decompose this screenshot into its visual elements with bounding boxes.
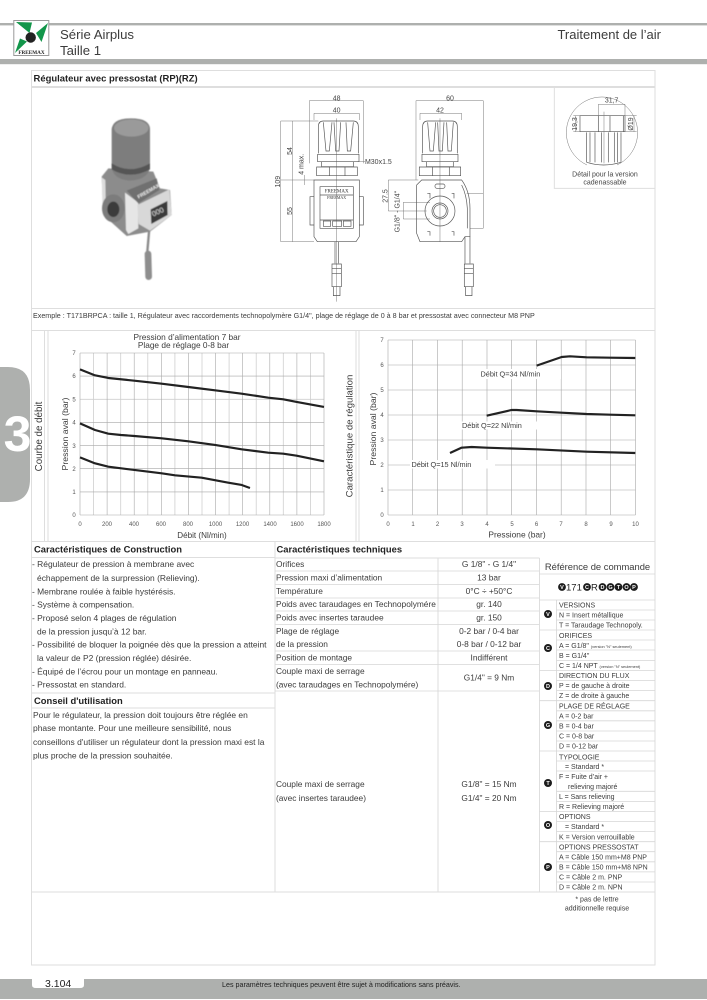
row lines xyxy=(540,574,655,882)
spec values: Indifférent xyxy=(471,652,508,662)
spec values: gr. 140 xyxy=(476,599,502,609)
page number tab: 3.104 xyxy=(45,978,71,990)
x axis ticks xyxy=(386,522,639,528)
dimensions: 48 xyxy=(333,96,341,103)
y axis ticks: 2 xyxy=(72,467,76,473)
group: ports: C = 1/4 NPT (version "N" seulement) xyxy=(559,663,641,670)
logo: Freemax: FREEMAX xyxy=(18,50,45,56)
x axis ticks: 8 xyxy=(584,522,588,528)
detail drawing xyxy=(566,97,638,165)
dimensions: 60 xyxy=(446,96,454,103)
y axis title: Pression aval (bar) xyxy=(60,397,70,470)
group: typology: L = Sans relieving xyxy=(559,794,615,801)
table grid lines xyxy=(32,542,556,892)
x axis ticks: 800 xyxy=(183,522,194,528)
x axis title: Pressione (bar) xyxy=(488,530,546,540)
y axis ticks: 1 xyxy=(72,490,76,496)
order code: O xyxy=(624,585,629,591)
feature list: - Possibilité de bloquer la poignée dès que la pression a atteint xyxy=(32,640,267,650)
group: versions: N = Insert métallique xyxy=(559,613,623,620)
technical drawing: front view xyxy=(275,96,392,302)
chart: flow curve xyxy=(34,332,331,540)
group: adjustment range xyxy=(544,702,630,750)
y axis ticks: 1 xyxy=(380,488,384,494)
x axis ticks: 0 xyxy=(386,522,390,528)
feature list: - Pressostat en standard. xyxy=(32,680,126,690)
heading: Caractéristiques de Construction xyxy=(34,544,182,554)
group: flow direction xyxy=(544,673,630,700)
spec labels: (avec insertes taraudee) xyxy=(276,793,366,803)
disclaimer: Les paramètres techniques peuvent être sujet à modifications sans préavis. xyxy=(222,981,461,989)
group: adjustment range: PLAGE DE RÉGLAGE xyxy=(559,702,630,710)
spec values: G 1/8" - G 1/4" xyxy=(462,559,516,569)
y axis ticks: 6 xyxy=(380,363,384,369)
dimensions: M30x1.5 xyxy=(365,159,392,166)
x axis ticks: 4 xyxy=(485,522,489,528)
outline: FREEMAX xyxy=(327,195,346,200)
group: pressure switch options: C = Câble 2 m. PNP xyxy=(559,874,623,882)
spec labels xyxy=(276,559,436,803)
dimensions: 109 xyxy=(275,176,282,187)
curves xyxy=(450,356,635,453)
group: pressure switch options: P xyxy=(546,865,550,871)
group: ports: ORIFICES xyxy=(559,633,592,640)
spec labels: Pression maxi d’alimentation xyxy=(276,572,383,582)
group: flow direction: Z = de droite à gauche xyxy=(559,693,629,700)
x axis ticks: 1800 xyxy=(317,522,331,528)
spec values: gr. 150 xyxy=(476,612,502,622)
paragraph xyxy=(33,710,265,760)
group: typology: TYPOLOGIE xyxy=(559,754,600,762)
section: technical specifications xyxy=(276,544,521,803)
group: pressure switch options: A = Câble 150 mm+M8 PNP xyxy=(559,854,647,862)
chart title: Plage de réglage 0-8 bar xyxy=(138,340,229,350)
spec labels: (avec taraudages en Technopolymére) xyxy=(276,680,418,690)
outline xyxy=(417,121,473,296)
order code: T xyxy=(617,585,621,591)
x axis ticks: 0 xyxy=(78,522,82,528)
x axis ticks: 5 xyxy=(510,522,514,528)
heading: Conseil d'utilisation xyxy=(34,695,123,706)
dimensions: 27.5 xyxy=(383,189,390,203)
x axis ticks: 1 xyxy=(411,522,415,528)
heading: Référence de commande xyxy=(545,561,650,572)
panel title: Régulateur avec pressostat (RP)(RZ) xyxy=(34,74,198,84)
y axis ticks: 4 xyxy=(72,420,76,426)
dimensions: 54 xyxy=(287,147,294,155)
dimensions: 40 xyxy=(333,108,341,115)
detail drawing: Ø19 xyxy=(628,117,635,131)
group: pressure switch options: OPTIONS PRESSOSTAT xyxy=(559,844,639,852)
group: typology: R = Relieving majoré xyxy=(559,804,624,811)
group: ports xyxy=(544,633,641,670)
x axis ticks xyxy=(78,522,331,528)
paragraph: phase montante. Pour une meilleure sensibilité, nous xyxy=(33,723,231,733)
spec labels: Couple maxi de serrage xyxy=(276,666,365,676)
group: flow direction: D xyxy=(546,684,550,690)
chart side label: Caractéristique de régulation xyxy=(344,375,356,497)
paragraph: plus proche de la pression souhaitée. xyxy=(33,750,173,760)
feature list: échappement de la surpression (Relieving). xyxy=(37,573,200,583)
group: options: = Standard * xyxy=(565,824,604,831)
spec values: G1/8" = 15 Nm xyxy=(461,779,517,789)
y axis ticks: 6 xyxy=(72,374,76,380)
y axis ticks: 3 xyxy=(72,444,76,450)
x axis ticks: 200 xyxy=(102,522,113,528)
spec labels: Couple maxi de serrage xyxy=(276,779,365,789)
feature list: - Équipé de l’écrou pour un montage en panneau. xyxy=(32,666,218,676)
curves xyxy=(80,369,324,488)
order code xyxy=(558,582,638,594)
group: pressure switch options: B = Câble 150 mm+M8 NPN xyxy=(559,864,648,872)
group: adjustment range: A = 0-2 bar xyxy=(559,714,594,720)
product photo xyxy=(102,118,172,277)
group: ports: C xyxy=(546,646,550,652)
footnote: additionnelle requise xyxy=(565,906,629,912)
chart title xyxy=(134,332,241,350)
y axis ticks: 7 xyxy=(380,338,384,344)
spec labels: Poids avec taraudages en Technopolymére xyxy=(276,599,436,609)
footnote: * pas de lettre xyxy=(575,896,619,904)
title: section: Traitement de l’air xyxy=(557,27,662,42)
label: Q=34 xyxy=(478,369,561,379)
cable and connector xyxy=(147,228,149,277)
regulator body: FREEMAX xyxy=(137,183,161,200)
spec values: G1/4" = 9 Nm xyxy=(464,672,514,682)
detail drawing: 19,3 xyxy=(572,117,579,131)
group: pressure switch options: D = Câble 2 m. NPN xyxy=(559,884,623,892)
x axis ticks: 6 xyxy=(535,522,539,528)
group: adjustment range: B = 0-4 bar xyxy=(559,724,594,730)
feature list: - Système à compensation. xyxy=(32,600,134,610)
y axis ticks: 0 xyxy=(380,513,384,519)
feature list: - Membrane roulée à faible hystérésis. xyxy=(32,586,176,596)
y axis ticks: 5 xyxy=(72,398,76,404)
spec labels: Température xyxy=(276,586,323,596)
group: versions: VERSIONS xyxy=(559,603,596,610)
spec values: 0-8 bar / 0-12 bar xyxy=(457,639,521,649)
group: ports: A = G1/8" (version "N" seulement) xyxy=(559,643,632,650)
regulator body xyxy=(102,168,172,236)
footnote xyxy=(565,896,629,912)
feature list: - Proposé selon 4 plages de régulation xyxy=(32,613,177,623)
paragraph: conseillons d'utiliser un régulateur dont la pression maxi est la xyxy=(33,737,265,747)
dimensions: 42 xyxy=(436,108,444,115)
outline: FREEMAX xyxy=(325,190,349,195)
chart title: Pression d’alimentation 7 bar xyxy=(134,332,241,342)
label: Q=22: Débit Q=22 Nl/min xyxy=(462,421,522,430)
spec labels: de la pression xyxy=(276,639,328,649)
group: versions xyxy=(544,603,643,630)
y axis ticks: 7 xyxy=(72,351,76,357)
group: adjustment range: D = 0-12 bar xyxy=(559,744,599,750)
dimensions xyxy=(275,96,392,302)
x axis title: Débit (Nl/min) xyxy=(177,531,227,540)
order code: P xyxy=(632,585,636,591)
order code: C xyxy=(585,585,589,591)
x axis ticks: 2 xyxy=(436,522,440,528)
detail caption: Détail pour la version xyxy=(572,172,638,179)
feature list: - Régulateur de pression à membrane avec xyxy=(32,559,194,569)
group: adjustment range: C = 0-8 bar xyxy=(559,734,595,740)
feature list: de la pression jusqu’à 12 bar. xyxy=(37,626,147,636)
spec labels: Plage de réglage xyxy=(276,626,339,636)
spec values: G1/4" = 20 Nm xyxy=(461,793,517,803)
pressure switch display xyxy=(137,189,172,231)
detail: lockable version xyxy=(554,88,655,188)
order code: G xyxy=(608,585,613,591)
dimensions: 55 xyxy=(287,207,294,215)
group: pressure switch options xyxy=(544,844,648,892)
grid xyxy=(80,353,324,515)
example line: Exemple : T171BRPCA : taille 1, Régulateur avec raccordements technopolymère G1/4", plage de réglage de 0 à 8 bar et pressostat avec connecteur M8 PNP xyxy=(33,312,535,320)
x axis ticks: 1200 xyxy=(236,522,250,528)
y axis ticks: 5 xyxy=(380,388,384,394)
group: versions: V xyxy=(546,612,550,618)
x axis ticks: 600 xyxy=(156,522,167,528)
footer band xyxy=(0,978,707,999)
dimensions: G1/8" - G1/4" xyxy=(394,190,401,232)
order code: V xyxy=(560,585,564,591)
side tab: chapter 3 xyxy=(0,367,31,502)
y axis ticks xyxy=(380,338,384,519)
feature list: la valeur de P2 (pression réglée) désirée. xyxy=(37,653,191,663)
group: options: K = Version verrouillable xyxy=(559,834,635,842)
spec values: 13 bar xyxy=(477,572,501,582)
main panel frame xyxy=(32,70,655,965)
group: options xyxy=(544,814,635,842)
adjustment knob xyxy=(112,118,150,181)
group: typology: F = Fuite d’air + xyxy=(559,774,608,781)
pressure switch display: 000 xyxy=(150,205,165,218)
group: typology: T xyxy=(546,781,550,787)
spec values: 0-2 bar / 0-4 bar xyxy=(459,626,519,636)
order code: D xyxy=(601,585,605,591)
detail caption: cadenassable xyxy=(583,179,627,186)
x axis ticks: 1600 xyxy=(290,522,304,528)
page number tab xyxy=(32,978,84,990)
grid xyxy=(388,340,636,515)
label: Q=34: Débit Q=34 Nl/min xyxy=(480,370,540,379)
x axis ticks: 1000 xyxy=(209,522,223,528)
group: options: OPTIONS xyxy=(559,814,591,821)
y axis ticks xyxy=(72,351,76,519)
pressure port xyxy=(102,194,125,222)
group: typology xyxy=(544,754,624,811)
group: typology: relieving majoré xyxy=(568,784,618,791)
chart: regulation characteristic xyxy=(344,338,639,540)
spec values: 0°C ÷ +50°C xyxy=(466,586,512,596)
group: versions: T = Taraudage Technopoly. xyxy=(559,623,643,630)
order code: 171 xyxy=(566,582,582,594)
logo: Freemax xyxy=(14,20,49,56)
order code: R xyxy=(591,582,598,594)
spec values xyxy=(457,559,521,803)
technical drawing: side view xyxy=(383,96,483,296)
group: flow direction: P = de gauche à droite xyxy=(559,683,630,690)
x axis ticks: 9 xyxy=(609,522,613,528)
detail box xyxy=(554,88,655,188)
chart side label: Courbe de débit xyxy=(34,401,45,471)
dimensions: 4 max. xyxy=(299,154,306,175)
section: order reference xyxy=(540,561,655,912)
group: options: O xyxy=(546,823,551,829)
section: usage advice xyxy=(33,695,265,760)
spec labels: Orifices xyxy=(276,559,304,569)
header band xyxy=(0,20,707,64)
x axis ticks: 400 xyxy=(129,522,140,528)
heading: Caractéristiques techniques xyxy=(276,544,402,554)
y axis ticks: 4 xyxy=(380,413,384,419)
section: construction features xyxy=(32,544,267,690)
y axis ticks: 3 xyxy=(380,438,384,444)
group: ports: B = G1/4" xyxy=(559,653,590,660)
group: adjustment range: G xyxy=(546,723,550,729)
spec labels: Position de montage xyxy=(276,652,352,662)
y axis title: Pression aval (bar) xyxy=(368,392,378,465)
title: size: Taille 1 xyxy=(60,43,101,58)
paragraph: Pour le régulateur, la pression doit toujours être réglée en xyxy=(33,710,248,720)
outline xyxy=(310,121,363,296)
side tab: chapter 3: 3 xyxy=(4,406,31,462)
x axis ticks: 3 xyxy=(460,522,464,528)
dimensions xyxy=(383,96,483,242)
x axis ticks: 1400 xyxy=(263,522,277,528)
detail caption xyxy=(572,172,638,186)
title: series: Série Airplus xyxy=(60,27,134,42)
group: flow direction: DIRECTION DU FLUX xyxy=(559,673,630,680)
y axis ticks: 0 xyxy=(72,513,76,519)
x axis ticks: 7 xyxy=(559,522,563,528)
detail drawing: 31,7 xyxy=(605,97,619,104)
spec labels: Poids avec insertes taraudee xyxy=(276,612,384,622)
group: typology: = Standard * xyxy=(565,764,604,771)
feature list xyxy=(32,559,267,690)
label: Q=15: Débit Q=15 Nl/min xyxy=(412,460,471,469)
x axis ticks: 10 xyxy=(632,522,639,528)
y axis ticks: 2 xyxy=(380,463,384,469)
